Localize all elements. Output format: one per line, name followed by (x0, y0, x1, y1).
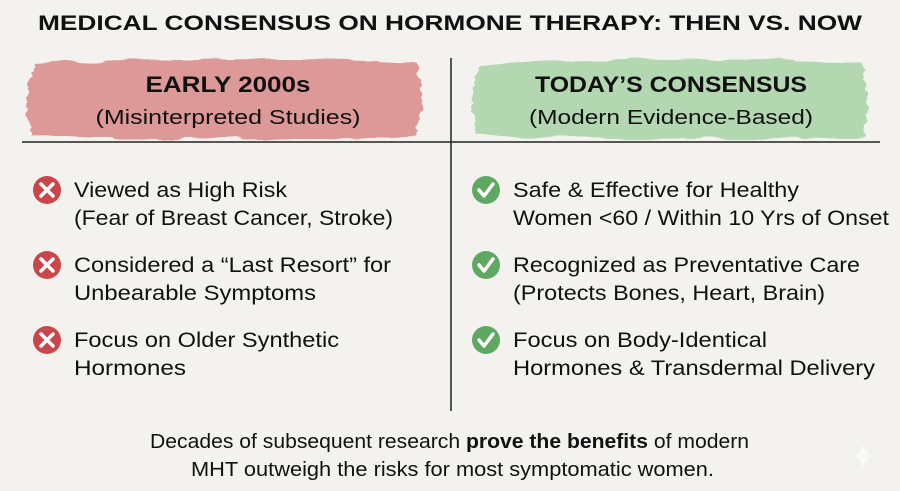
item: last resort: Unbearable Symptoms (74, 282, 316, 305)
icon: sparkle (853, 444, 873, 468)
footer text (150, 431, 749, 481)
item: body-identical: Hormones & Transdermal Delivery (513, 357, 876, 380)
item: preventative (472, 251, 860, 305)
item: last resort (33, 251, 391, 305)
item: synthetic (33, 326, 339, 380)
item: high risk: (Fear of Breast Cancer, Stroke) (74, 207, 393, 230)
item: safe: Safe & Effective for Healthy (513, 179, 800, 202)
item: high risk (33, 176, 393, 230)
item: safe: Women <60 / Within 10 Yrs of Onset (513, 207, 889, 230)
header: today's consensus (472, 60, 868, 139)
item: safe (472, 176, 889, 230)
item: body-identical: Focus on Body-Identical (513, 329, 767, 352)
item: high risk: Viewed as High Risk (74, 179, 288, 202)
header: today's consensus: TODAY’S CONSENSUS (535, 72, 807, 97)
footer text: MHT outweigh the risks for most symptomatic women. (191, 459, 714, 481)
vertical divider (450, 58, 452, 411)
left items (33, 176, 393, 380)
footer text: Decades of subsequent research prove the benefits of modern (150, 431, 749, 453)
header: early 2000s: (Misinterpreted Studies) (96, 107, 360, 129)
item: body-identical (472, 326, 876, 380)
item: synthetic: Hormones (74, 357, 186, 380)
header: early 2000s (26, 60, 422, 139)
header: today's consensus: (Modern Evidence-Based) (529, 107, 813, 129)
item: synthetic: Focus on Older Synthetic (74, 329, 339, 352)
right items (472, 176, 889, 380)
title: MEDICAL CONSENSUS ON HORMONE THERAPY: THEN VS. NOW (38, 12, 862, 35)
header: early 2000s: EARLY 2000s (146, 72, 310, 97)
item: preventative: (Protects Bones, Heart, Brain) (513, 282, 825, 305)
item: last resort: Considered a “Last Resort” for (74, 254, 391, 277)
item: preventative: Recognized as Preventative Care (513, 254, 860, 277)
